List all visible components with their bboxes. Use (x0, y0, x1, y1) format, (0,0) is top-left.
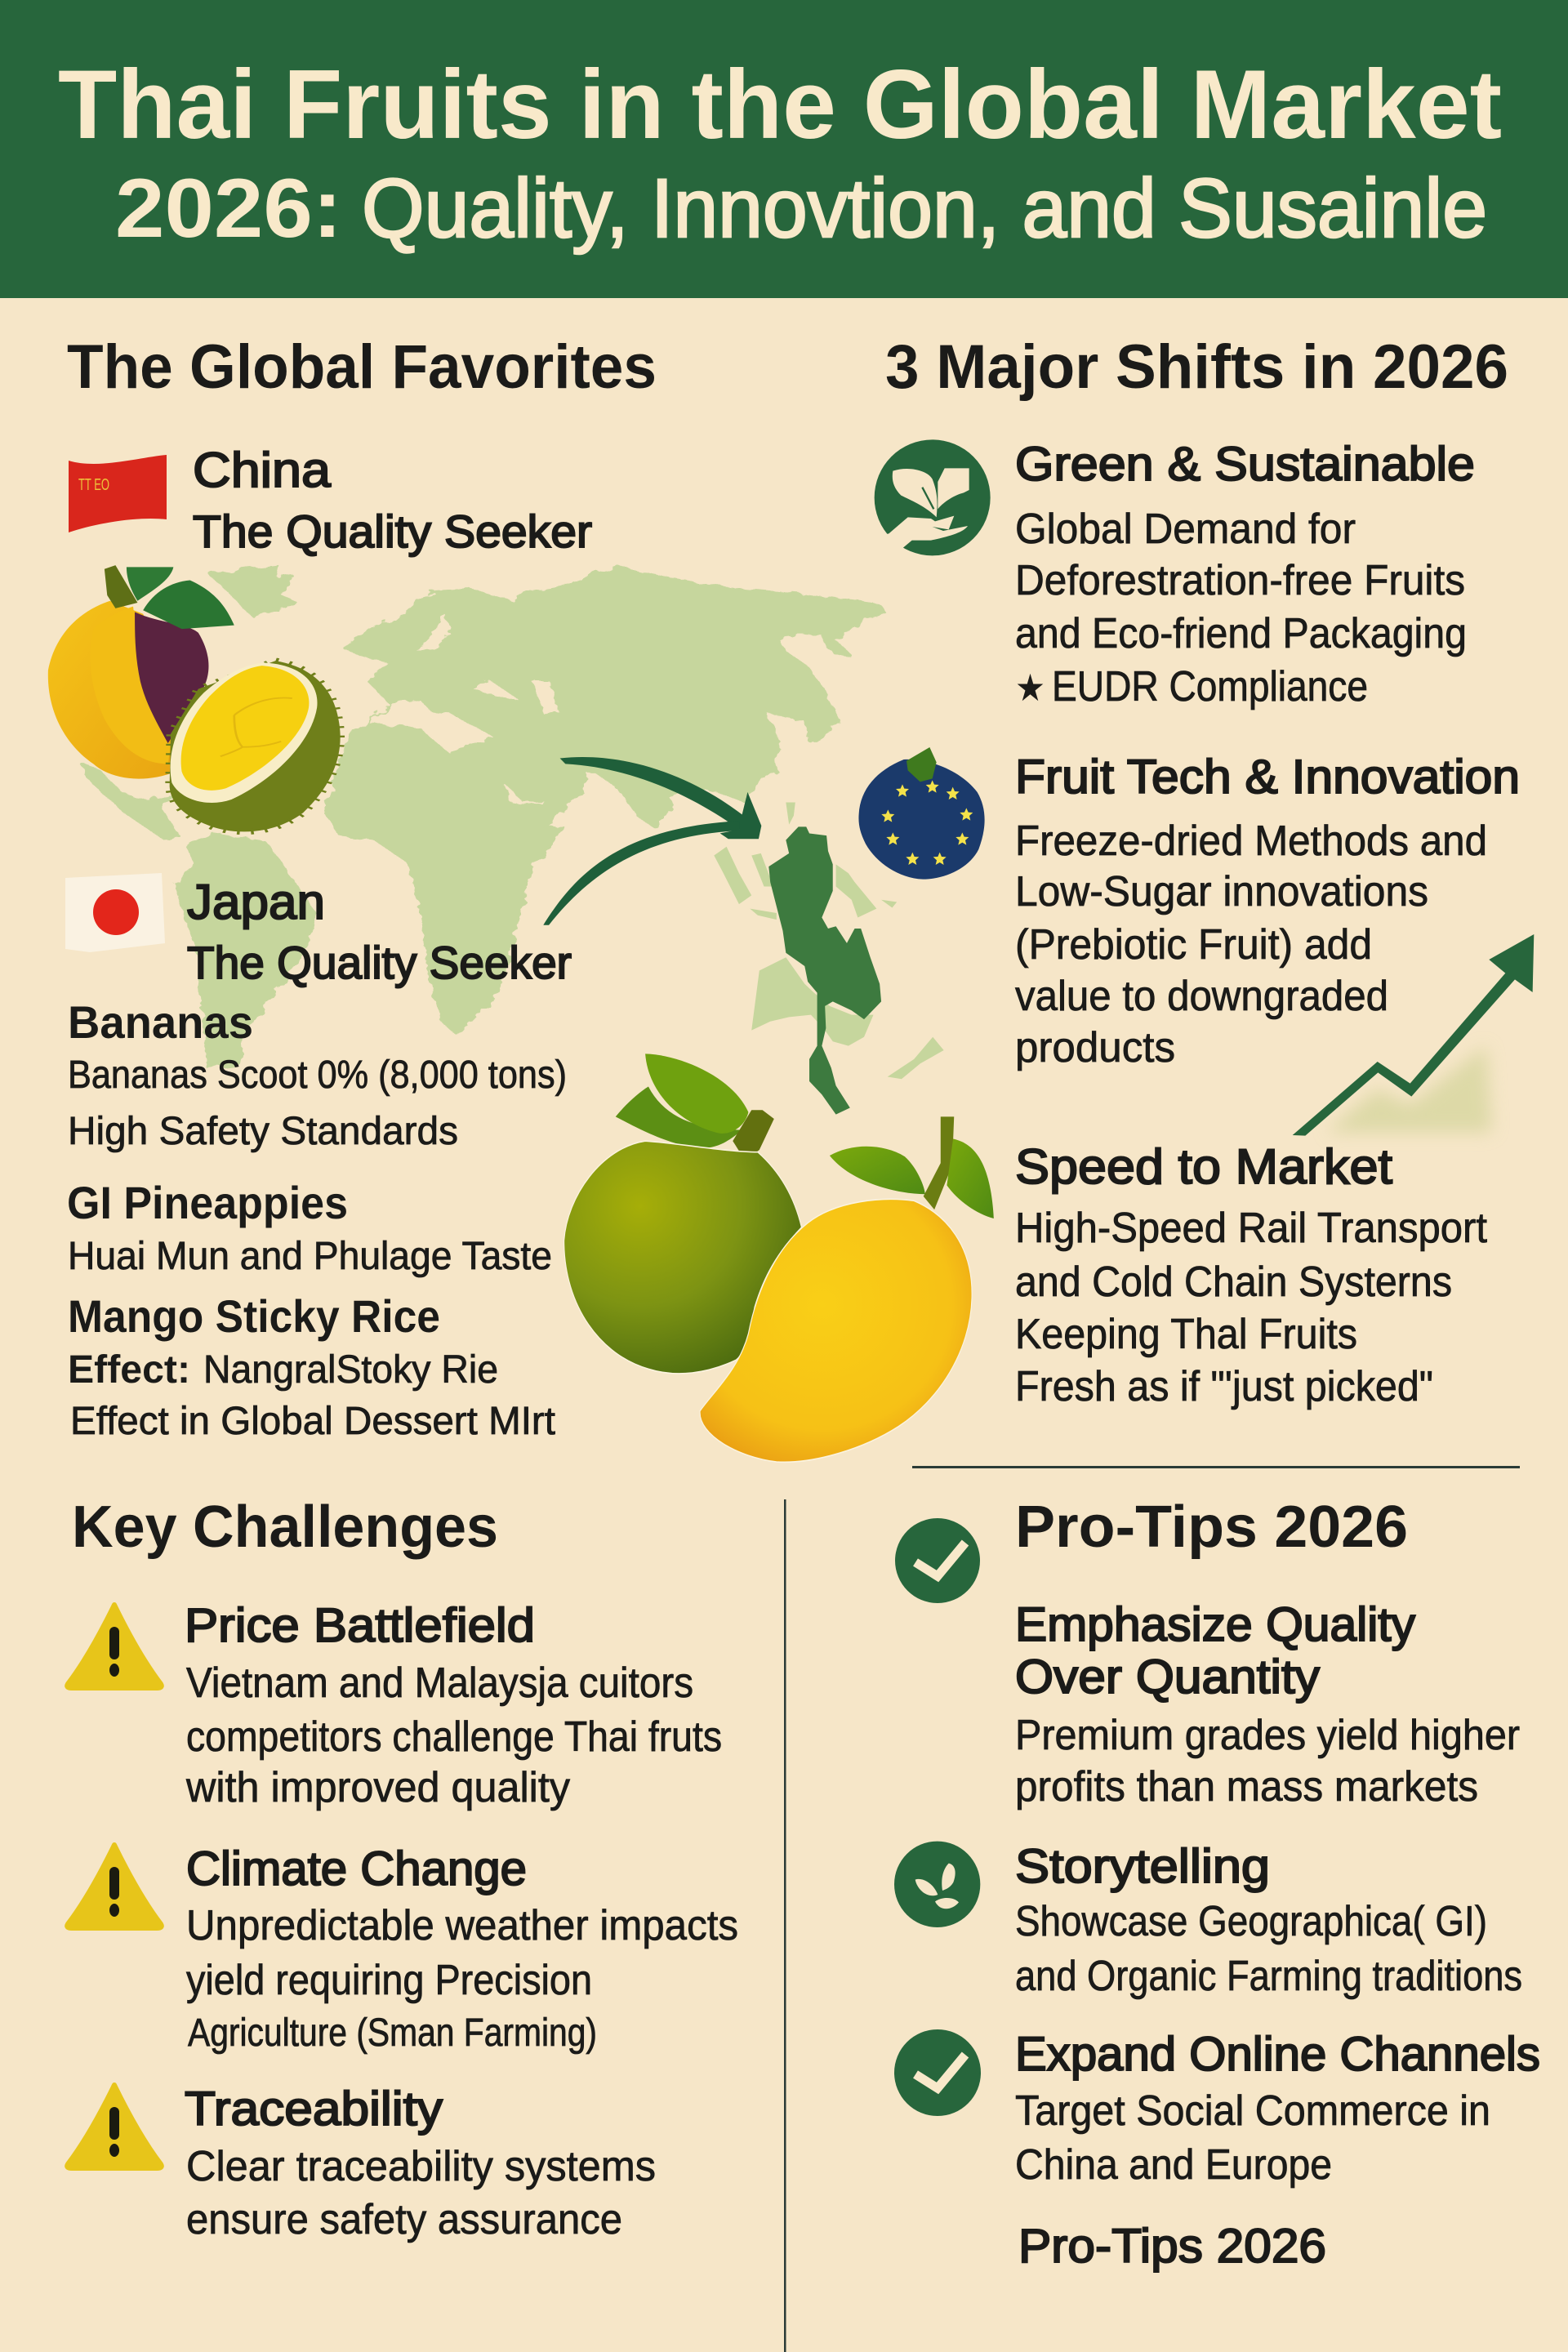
text block: Fruit Tech and Innovation: (Prebiotic Fruit) add (1015, 921, 1372, 969)
fruit illustration: mangosteen and durian (48, 565, 341, 831)
title line 2: 2026: (115, 162, 342, 255)
text block: Climate Change: yield requiring Precision (186, 1957, 592, 2004)
icon: check badge 1 (895, 1518, 980, 1603)
China label: China (193, 443, 332, 497)
text block: Emphasize Quality: Premium grades yield higher (1015, 1712, 1520, 1759)
China label: The Quality Seeker (193, 506, 592, 557)
guava leaves and stem (616, 1086, 742, 1148)
text block: Bananas: High Safety Standards (68, 1110, 458, 1153)
icon: EU badge with leaf (858, 747, 985, 880)
text block: Speed to Market (1015, 1139, 1488, 1410)
text block: Green and Sustainable: and Eco-friend Packaging (1015, 610, 1467, 657)
text block: Fruit Tech and Innovation: Fruit Tech & Innovation (1015, 751, 1520, 804)
stem and leaves (105, 565, 137, 608)
icon: warning triangle 2 (67, 1845, 162, 1928)
Japan label (187, 875, 572, 988)
text block: Bananas (68, 996, 567, 1153)
text block: Mango Sticky Rice (68, 1290, 555, 1443)
text block: Price Battlefield: Price Battlefield (185, 1599, 535, 1652)
map: North America fragment (82, 764, 176, 839)
icon: China flag: TT EO (78, 476, 109, 494)
section heading: Key Challenges: Key Challenges (72, 1494, 498, 1560)
text block: Speed to Market: Fresh as if "'just picked" (1015, 1363, 1433, 1410)
text block: Bananas: Bananas Scoot 0% (8,000 tons) (68, 1054, 567, 1097)
text block: Storytelling: Storytelling (1015, 1840, 1270, 1893)
EU stars (881, 780, 973, 865)
text block: Climate Change: Unpredictable weather impacts (186, 1902, 738, 1949)
durian rim (171, 662, 318, 803)
text block: Climate Change: Climate Change (186, 1842, 527, 1895)
Thailand highlighted (768, 826, 881, 1115)
durian shell (170, 661, 341, 831)
icon: China flag (69, 455, 167, 532)
yellow fruit (48, 601, 176, 779)
text block: Fruit Tech and Innovation: Freeze-dried Methods and (1015, 817, 1487, 865)
fruit illustration: guava and mango (564, 1054, 994, 1462)
map: Greenland (212, 567, 295, 616)
text block: Storytelling: Showcase Geographica( GI) (1015, 1898, 1487, 1945)
text block: Climate Change: Agriculture (Sman Farming) (188, 2011, 597, 2055)
icon: hand holding leaf (866, 439, 991, 558)
text block: Mango Sticky Rice: Mango Sticky Rice (68, 1290, 440, 1342)
Japan label: The Quality Seeker (187, 937, 572, 988)
text block: Speed to Market: and Cold Chain Systerns (1015, 1258, 1452, 1306)
text block: Climate Change (186, 1842, 738, 2055)
footer label: Pro-Tips 2026: Pro-Tips 2026 (1018, 2220, 1326, 2273)
section heading: 3 Major Shifts in 2026: 3 Major Shifts in 2026 (885, 332, 1508, 402)
guava body (564, 1141, 801, 1374)
icon: check badge 2 (894, 2029, 981, 2116)
text block: Storytelling (1015, 1840, 1522, 2000)
text block: Expand Online Channels: Expand Online Channels (1015, 2028, 1540, 2081)
text block: Emphasize Quality: Over Quantity (1015, 1650, 1320, 1704)
text block: Traceability (185, 2082, 656, 2243)
text block: Speed to Market: Speed to Market (1015, 1139, 1392, 1194)
text block: Green and Sustainable (1015, 438, 1475, 710)
text block: Emphasize Quality: profits than mass markets (1015, 1763, 1478, 1811)
text block: Speed to Market: Keeping Thal Fruits (1015, 1311, 1357, 1358)
arrows converging on Thailand (543, 757, 761, 925)
map: South America (176, 835, 314, 1067)
text block: Traceability: ensure safety assurance (186, 2196, 622, 2243)
purple rind (135, 612, 208, 743)
mango stem and leaves (924, 1116, 954, 1209)
map: Southeast Asia, Australia and Thailand (714, 803, 944, 1115)
China label (193, 443, 592, 557)
map: inland seas (369, 614, 557, 805)
text block: GI Pineapples: GI Pineappies (67, 1177, 348, 1228)
text block: Price Battlefield: with improved quality (185, 1764, 570, 1811)
icon: rising trend arrow (1293, 934, 1534, 1136)
header banner (0, 0, 1568, 298)
text block: Price Battlefield (185, 1599, 722, 1811)
text block: Emphasize Quality (1015, 1598, 1520, 1811)
icon: warning triangle 1 (67, 1605, 162, 1688)
text block: Green and Sustainable: Green & Sustainable (1015, 438, 1475, 491)
title line 2: Quality, Innovtion, and Susainle (362, 162, 1487, 255)
text block: Green and Sustainable: EUDR Compliance (1052, 663, 1368, 710)
text block: Mango Sticky Rice: NangralStoky Rie (203, 1348, 498, 1392)
text block: Price Battlefield: Vietnam and Malaysja cuitors (186, 1659, 693, 1707)
title line 1: Thai Fruits in the Global Market (58, 50, 1502, 159)
text block: Expand Online Channels: China and Europe (1015, 2141, 1332, 2189)
text block: Green and Sustainable: Global Demand for (1015, 506, 1356, 553)
section heading: Pro-Tips 2026: Pro-Tips 2026 (1015, 1494, 1408, 1560)
icon: Japan flag (65, 873, 165, 952)
text block: Fruit Tech and Innovation (1015, 751, 1520, 1071)
text block: Expand Online Channels (1015, 2028, 1540, 2189)
text block: Emphasize Quality: Emphasize Quality (1015, 1598, 1415, 1651)
section heading: The Global Favorites: The Global Favorites (67, 332, 657, 402)
text block: Fruit Tech and Innovation: value to downgraded (1015, 973, 1388, 1020)
text block: Price Battlefield: competitors challenge Thai fruts (186, 1713, 722, 1761)
text block: Speed to Market: High-Speed Rail Transport (1015, 1205, 1488, 1252)
durian flesh (181, 666, 309, 791)
text block: Green and Sustainable: Deforestration-free Fruits (1015, 557, 1465, 604)
Japan label: Japan (187, 875, 325, 929)
text block: Bananas: Bananas (68, 996, 253, 1048)
text block: GI Pineapples: Huai Mun and Phulage Taste (68, 1235, 552, 1278)
mango body (700, 1199, 972, 1462)
text block: Mango Sticky Rice: Effect in Global Dessert MIrt (70, 1400, 555, 1443)
text block: Mango Sticky Rice: Effect: (68, 1348, 190, 1392)
text block: Traceability: Traceability (185, 2082, 443, 2136)
world map (82, 567, 883, 1067)
text block: Fruit Tech and Innovation: products (1015, 1024, 1175, 1071)
text block: Traceability: Clear traceability systems (186, 2143, 656, 2190)
map: Eurasia and Africa (325, 567, 883, 1034)
text block: Expand Online Channels: Target Social Commerce in (1015, 2087, 1490, 2135)
islands and Australia (714, 803, 944, 1079)
text block: GI Pineapples (67, 1177, 552, 1278)
icon: warning triangle 3 (67, 2085, 162, 2168)
text block: Green and Sustainable: ★ (1015, 666, 1045, 710)
text block: Fruit Tech and Innovation: Low-Sugar innovations (1015, 868, 1428, 915)
icon: sprout badge (894, 1842, 980, 1927)
